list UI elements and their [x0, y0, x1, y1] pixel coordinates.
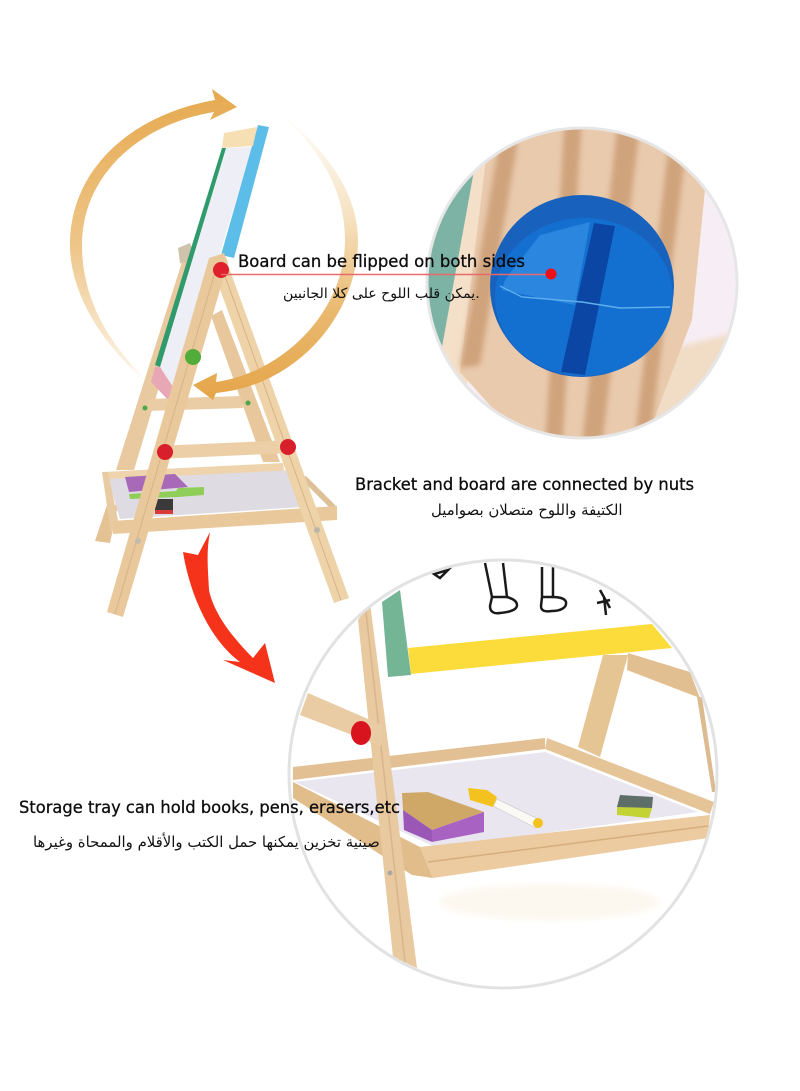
grain on legs [115, 262, 341, 614]
green board rail [382, 590, 411, 677]
callout dot [546, 268, 556, 280]
background [467, 192, 736, 406]
wood plank [460, 130, 705, 436]
nut back [490, 195, 674, 377]
circle outline [289, 560, 717, 988]
red knob right [280, 439, 296, 455]
marker [129, 487, 204, 499]
marker pen [468, 788, 543, 828]
screws [135, 538, 141, 544]
lower crossbar [157, 440, 290, 459]
wood grain stripes [460, 115, 684, 450]
sponge eraser [617, 795, 653, 818]
arabic: board flip: يمكن قلب اللوح على كلا الجانبين. [283, 286, 480, 302]
back leg [578, 655, 628, 757]
nut highlight [502, 222, 590, 305]
tray back rail [103, 463, 284, 481]
front rail grain [428, 826, 708, 862]
yellow board rail [408, 624, 672, 674]
tray right rail [300, 476, 337, 508]
heading: storage tray: Storage tray can hold books, pens, erasers,etc [19, 798, 400, 818]
green board edge [155, 148, 226, 367]
green studs [142, 406, 148, 410]
purple box [402, 792, 484, 842]
board rear support [178, 243, 196, 266]
rear left leg [116, 262, 196, 470]
blue board edge [221, 125, 269, 258]
nut slot [561, 223, 615, 375]
teal board edge [428, 174, 474, 346]
kid drawing: boots and writing [434, 563, 610, 615]
tray front rail [420, 815, 710, 878]
nut face [495, 218, 673, 376]
far leg [697, 697, 716, 792]
detail photo clip [293, 562, 715, 968]
marker yellow cap [468, 788, 497, 807]
main leg grain [366, 612, 405, 962]
white far left [420, 120, 460, 450]
heading: board flip: Board can be flipped on both sides [238, 252, 525, 272]
circle detail: storage tray [285, 555, 725, 995]
purple box [125, 474, 188, 492]
marker tip [533, 818, 543, 828]
upper crossbar [146, 396, 243, 411]
circle outline [427, 128, 737, 438]
arabic: bracket and nuts: الكتيفة واللوح متصلان بصواميل [431, 501, 623, 519]
marker body [493, 799, 540, 828]
front right leg [209, 254, 349, 603]
pale wood strip [442, 164, 486, 384]
tray surface [295, 752, 698, 848]
nut seam [500, 286, 670, 308]
red knob top [213, 262, 229, 278]
background [285, 555, 725, 995]
pink board edge [151, 367, 173, 402]
red knob left [157, 444, 173, 460]
peach blur [654, 332, 727, 418]
left crossbar [300, 693, 382, 746]
circle detail: blue nut [426, 126, 738, 440]
whiteboard side face [160, 147, 252, 387]
heading: bracket and nuts: Bracket and board are connected by nuts [355, 475, 694, 495]
infographic canvas [20, 89, 738, 990]
tray left rail [293, 782, 433, 878]
circular arrow: lower right [193, 113, 358, 400]
easel product [95, 125, 349, 617]
arabic: storage tray: صينية تخزين يمكنها حمل الكتب والأقلام والممحاة وغيرها [33, 833, 380, 851]
green knob [185, 349, 201, 365]
tray surface [108, 470, 302, 519]
circular arrow: upper left [70, 89, 237, 378]
leg screw [388, 870, 392, 876]
box left face [403, 810, 432, 842]
top wood cap [222, 127, 257, 148]
sponge layers [617, 805, 652, 818]
front left leg [107, 253, 228, 617]
box right face [432, 812, 484, 842]
tray back rail [293, 738, 545, 780]
main front leg [358, 603, 417, 968]
sponge top [617, 795, 653, 808]
red curved arrow [183, 532, 275, 683]
soft shadow [440, 884, 660, 920]
tray left rail [102, 472, 118, 533]
callout leader line [221, 274, 550, 276]
rear foot [95, 505, 118, 543]
box top [402, 792, 484, 830]
red knob [351, 721, 371, 745]
inner back leg [211, 310, 280, 462]
tray right rail [545, 738, 714, 814]
detail photo clip [428, 130, 736, 436]
right crossbar [627, 653, 700, 698]
eraser [155, 499, 173, 514]
tray front rail [112, 506, 337, 534]
